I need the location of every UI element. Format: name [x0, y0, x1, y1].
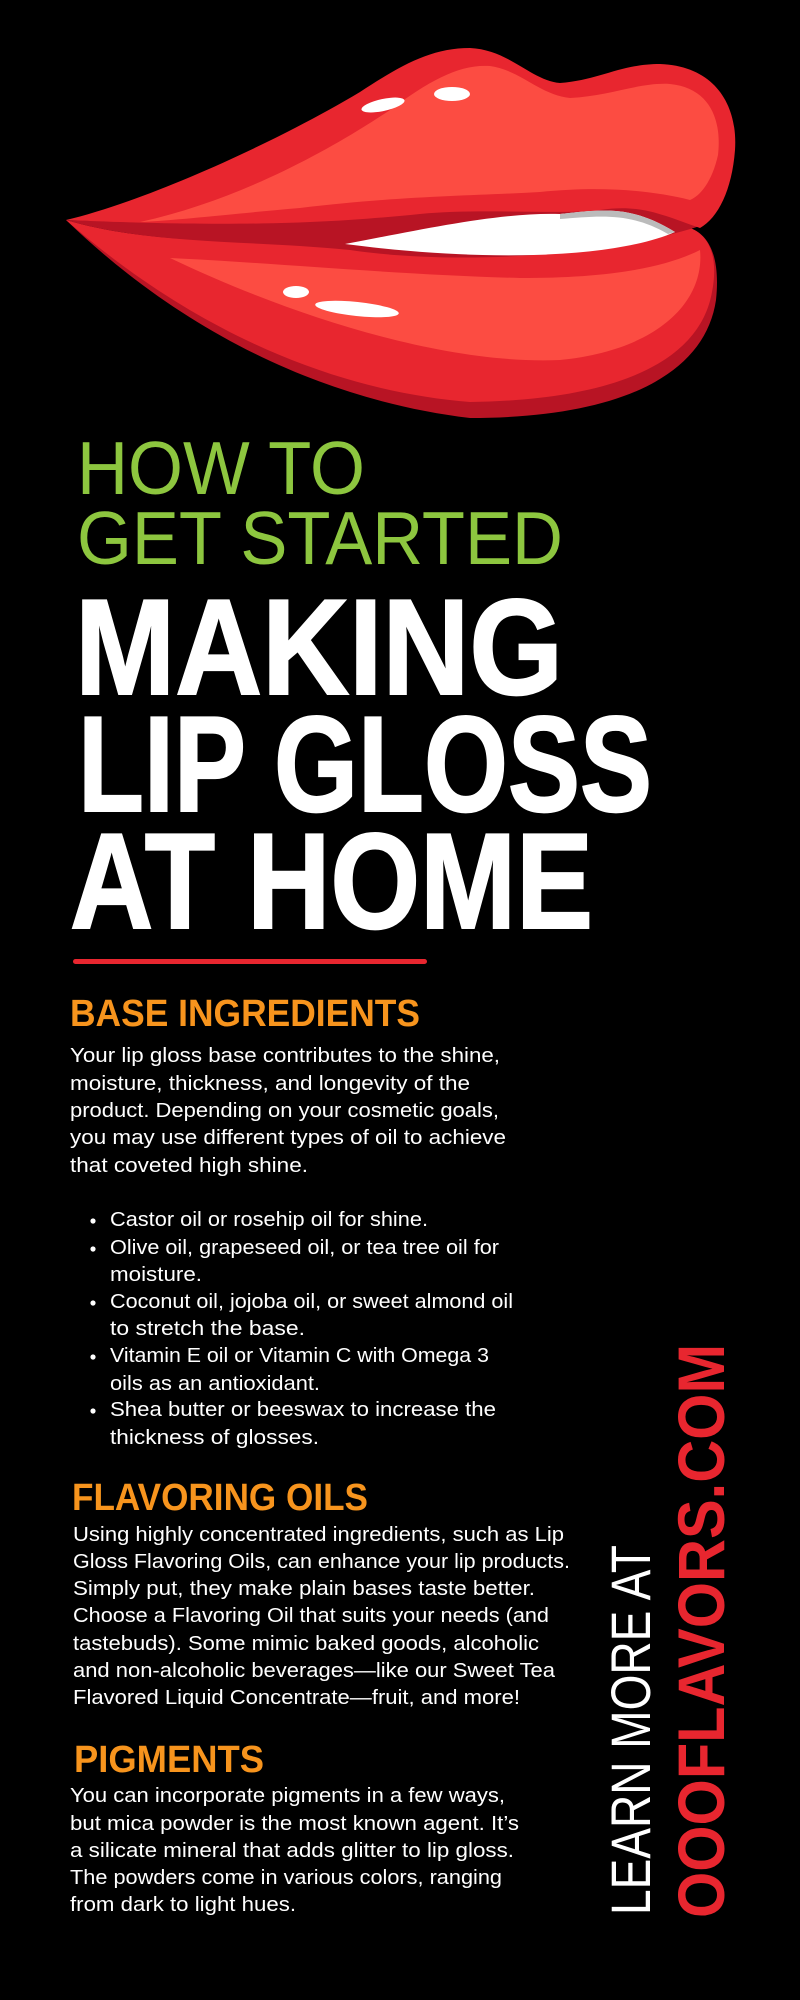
heading: flavoring oils: FLAVORING OILS: [72, 1477, 368, 1519]
text: base intro: Your lip gloss base contributes to the shine,: [70, 1044, 500, 1067]
text: base intro: [70, 1044, 506, 1177]
list: base oils: [90, 1208, 513, 1449]
heading: pigments: PIGMENTS: [74, 1739, 264, 1781]
title: how to get started: HOW TO: [77, 426, 365, 510]
icon: red lips: [66, 48, 735, 418]
text: flavoring oils: Choose a Flavoring Oil that suits your needs (and: [73, 1604, 549, 1627]
text: flavoring oils: Gloss Flavoring Oils, can enhance your lip products.: [73, 1550, 570, 1573]
text: pigments: from dark to light hues.: [70, 1893, 296, 1916]
text: flavoring oils: tastebuds). Some mimic baked goods, alcoholic: [73, 1632, 539, 1655]
title: making lip gloss at home: LIP GLOSS: [78, 688, 652, 840]
list: base oils: moisture.: [110, 1263, 202, 1286]
title: making lip gloss at home: [70, 571, 652, 957]
list: base oils: to stretch the base.: [110, 1317, 305, 1340]
red divider: [73, 959, 427, 964]
text: base intro: you may use different types of oil to achieve: [70, 1126, 506, 1149]
title: how to get started: [77, 426, 563, 580]
text: base intro: product. Depending on your cosmetic goals,: [70, 1099, 499, 1122]
text: pigments: [70, 1784, 519, 1916]
text: flavoring oils: Using highly concentrated ingredients, such as Lip: [73, 1523, 564, 1546]
text: flavoring oils: [73, 1523, 570, 1709]
text: pigments: The powders come in various colors, ranging: [70, 1866, 502, 1889]
heading: base ingredients: BASE INGREDIENTS: [70, 993, 420, 1035]
list: base oils: Olive oil, grapeseed oil, or tea tree oil for: [110, 1236, 499, 1259]
text: pigments: You can incorporate pigments in a few ways,: [70, 1784, 505, 1807]
text: flavoring oils: Flavored Liquid Concentrate—fruit, and more!: [73, 1686, 520, 1709]
list: base oils: Castor oil or rosehip oil for shine.: [110, 1208, 428, 1231]
text: pigments: but mica powder is the most known agent. It’s: [70, 1812, 519, 1835]
text: base intro: that coveted high shine.: [70, 1154, 308, 1177]
list: base oils: oils as an antioxidant.: [110, 1372, 320, 1395]
text: pigments: a silicate mineral that adds glitter to lip gloss.: [70, 1839, 514, 1862]
list: base oils: Coconut oil, jojoba oil, or sweet almond oil: [110, 1290, 513, 1313]
title: making lip gloss at home: AT HOME: [70, 805, 593, 957]
text: flavoring oils: Simply put, they make plain bases taste better.: [73, 1577, 535, 1600]
text: flavoring oils: and non-alcoholic beverages—like our Sweet Tea: [73, 1659, 556, 1682]
text: base intro: moisture, thickness, and longevity of the: [70, 1072, 470, 1095]
title: making lip gloss at home: MAKING: [75, 571, 563, 723]
list: base oils: Shea butter or beeswax to increase the: [110, 1398, 496, 1421]
vertical text: learn more at: LEARN MORE AT: [599, 1545, 662, 1915]
list: base oils: thickness of glosses.: [110, 1426, 319, 1449]
list: base oils: Vitamin E oil or Vitamin C with Omega 3: [110, 1344, 489, 1367]
vertical text: ooflavors.com: OOOFLAVORS.COM: [664, 1344, 738, 1918]
title: how to get started: GET STARTED: [77, 496, 563, 580]
